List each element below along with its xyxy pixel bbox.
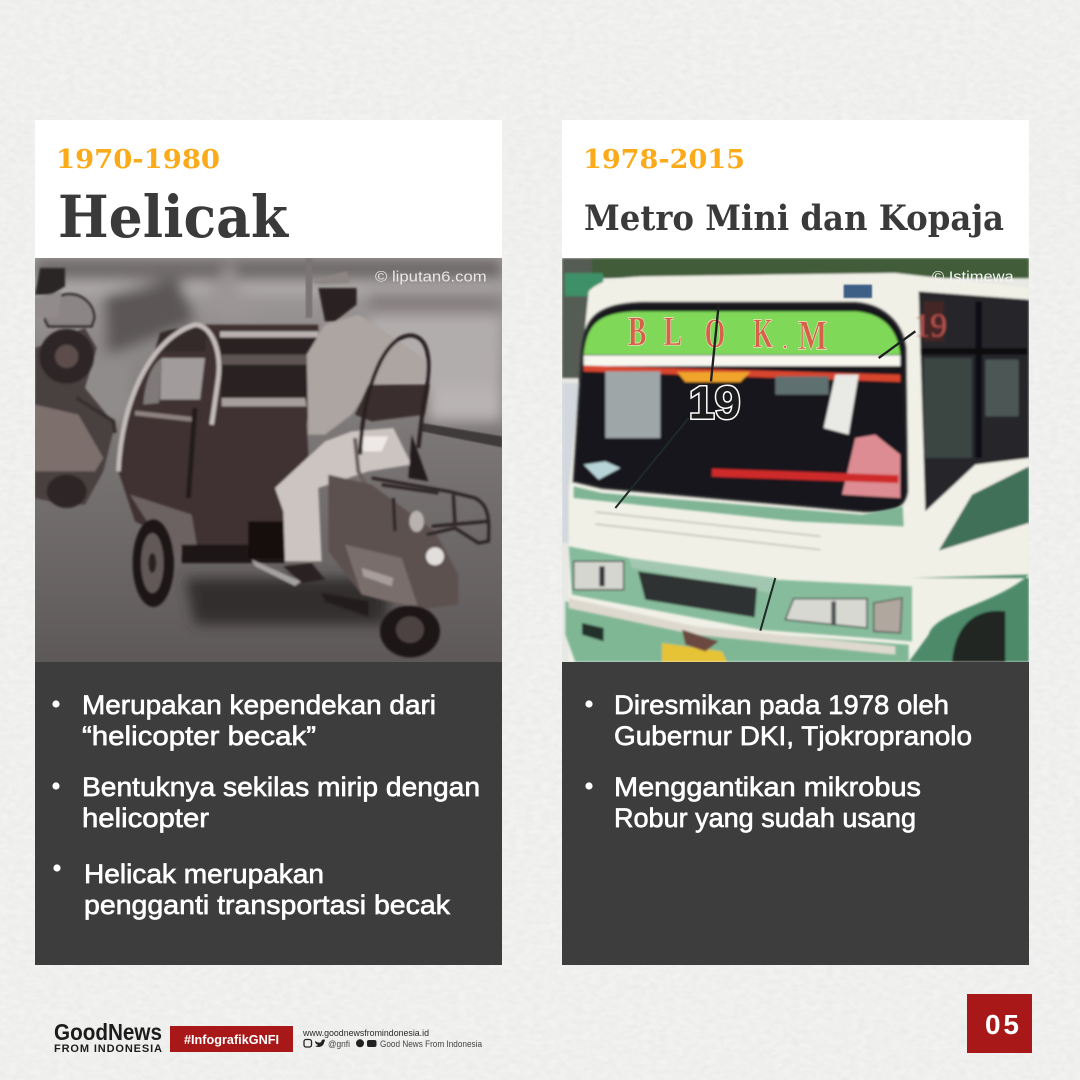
green destination band <box>584 311 900 355</box>
logo: GoodNews: FROM INDONESIA <box>54 1043 162 1055</box>
seat and backrest <box>355 385 430 421</box>
destination sign text: L <box>664 308 682 355</box>
bumper <box>565 601 909 662</box>
logo: GoodNews <box>54 1019 162 1055</box>
icon: facebook <box>356 1039 364 1047</box>
credit text: © Istimewa <box>932 269 1015 285</box>
footer <box>54 994 1032 1055</box>
icon: twitter <box>315 1039 325 1047</box>
text panel: Helicak facts: “helicopter becak” <box>82 721 316 751</box>
text panel: Metro Mini facts: Menggantikan mikrobus <box>614 772 921 802</box>
website and social handles: Good News From Indonesia <box>380 1039 483 1050</box>
front wheel <box>380 605 440 657</box>
scooter body <box>328 475 458 610</box>
windshield <box>574 303 907 512</box>
heading card: Helicak <box>35 120 502 258</box>
destination sign text: . <box>783 332 788 354</box>
route number: 19 <box>689 377 741 429</box>
luggage rack <box>372 478 489 543</box>
text panel: Helicak facts: Helicak merupakan <box>84 859 324 889</box>
lower green front <box>569 546 912 641</box>
hashtag badge: #InfografikGNFI <box>184 1032 279 1047</box>
heading card: Helicak: 1970-1980 <box>56 145 220 175</box>
text panel: Helicak facts <box>35 662 502 965</box>
page number <box>967 994 1032 1053</box>
website and social handles: @gnfi <box>328 1039 350 1050</box>
icon: instagram <box>304 1040 312 1047</box>
destination sign text: O <box>705 310 725 357</box>
icon: youtube <box>367 1040 376 1047</box>
panel: Helicak <box>35 120 502 965</box>
credit text: © liputan6.com <box>375 269 487 285</box>
heading card: Metro Mini dan Kopaja: 1978-2015 <box>583 145 745 175</box>
heading card: Helicak: Helicak <box>58 183 290 251</box>
destination sign text <box>628 308 827 359</box>
text panel: Metro Mini facts: Gubernur DKI, Tjokropranolo <box>614 721 972 751</box>
text panel: Metro Mini facts: Diresmikan pada 1978 oleh <box>614 690 949 720</box>
photo: Helicak scooter taxi <box>35 258 502 662</box>
trousers <box>275 428 412 561</box>
cab body <box>118 325 318 551</box>
photo: green and white bus: 19 <box>914 307 947 344</box>
destination sign text: B <box>628 308 646 355</box>
hashtag badge <box>170 1026 293 1052</box>
text panel: Metro Mini facts <box>562 662 1029 965</box>
website and social handles: www.goodnewsfromindonesia.id <box>302 1028 429 1039</box>
reflection blocks <box>605 371 660 438</box>
photo: green and white bus <box>562 258 1029 662</box>
wheel arch <box>909 575 1029 662</box>
panel: Metro Mini dan Kopaja <box>562 120 1029 965</box>
text panel: Metro Mini facts: Robur yang sudah usang <box>614 803 916 833</box>
side stripe <box>939 466 1029 551</box>
page number: 05 <box>985 1009 1019 1040</box>
bus roof <box>569 273 1029 662</box>
text panel: Helicak facts: pengganti transportasi becak <box>84 890 451 920</box>
left scooter <box>35 328 115 505</box>
logo: GoodNews: GoodNews <box>54 1019 162 1045</box>
text panel: Helicak facts: helicopter <box>82 803 209 833</box>
heading card: Metro Mini dan Kopaja: Metro Mini dan Kopaja <box>584 198 1004 239</box>
text panel: Helicak facts: Bentuknya sekilas mirip dengan <box>82 772 480 802</box>
driver <box>307 315 428 435</box>
front body trim <box>574 486 904 526</box>
text panel: Helicak facts: Merupakan kependekan dari <box>82 690 436 720</box>
rear wheel and fender <box>130 495 198 555</box>
heading card: Metro Mini dan Kopaja <box>562 120 1029 258</box>
destination sign text: K <box>753 310 773 357</box>
website and social handles <box>302 1028 483 1050</box>
destination sign text: M <box>798 312 827 359</box>
